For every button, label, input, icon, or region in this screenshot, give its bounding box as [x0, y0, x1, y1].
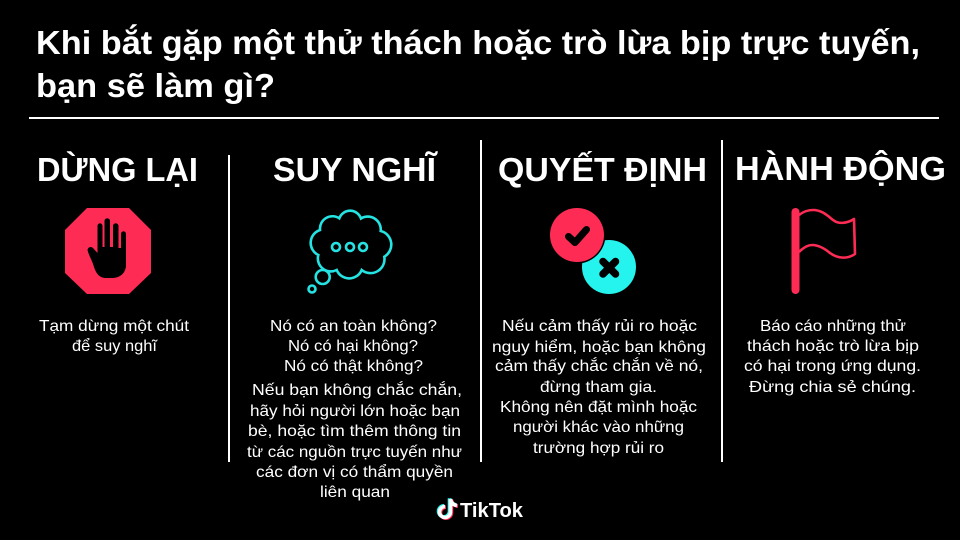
title	[36, 24, 920, 104]
text: think: từ các nguồn trực tuyến như	[247, 444, 462, 461]
text: think: liên quan	[320, 484, 390, 501]
heading: stop: DỪNG LẠI	[37, 151, 198, 188]
text: think: các đơn vị có thẩm quyền	[256, 463, 453, 481]
logo: TikTok: TikTok	[460, 500, 524, 522]
text: think: hãy hỏi người lớn hoặc bạn	[250, 403, 460, 420]
text: stop: Tạm dừng một chút	[39, 318, 190, 335]
text: stop: để suy nghĩ	[72, 337, 159, 355]
icon: thought bubble	[308, 211, 391, 292]
text: decide: đừng tham gia.	[540, 379, 657, 396]
text: decide: người khác vào những	[513, 419, 684, 436]
text: decide: nguy hiểm, hoặc bạn không	[492, 338, 706, 356]
text: decide: Nếu cảm thấy rủi ro hoặc	[502, 318, 697, 335]
text: act: Đừng chia sẻ chúng.	[749, 379, 916, 396]
heading: act: HÀNH ĐỘNG	[735, 149, 946, 187]
text: stop	[39, 318, 190, 355]
panel: decide	[492, 151, 707, 457]
text: act	[744, 318, 921, 396]
text: think	[247, 318, 462, 501]
panel: act	[735, 149, 946, 396]
title: Khi bắt gặp một thử thách hoặc trò lừa bịp trực tuyến,	[36, 24, 920, 61]
heading: think: SUY NGHĨ	[273, 151, 438, 188]
heading: decide: QUYẾT ĐỊNH	[498, 151, 707, 188]
text: act: Báo cáo những thử	[760, 318, 906, 335]
text: act: có hại trong ứng dụng.	[744, 358, 921, 375]
title: bạn sẽ làm gì?	[36, 67, 275, 104]
text: decide	[492, 318, 706, 457]
icon: stop hand	[65, 208, 151, 294]
panel: stop	[37, 151, 198, 355]
text: decide: Không nên đặt mình hoặc	[500, 399, 697, 416]
text: think: bè, hoặc tìm thêm thông tin	[248, 423, 461, 440]
logo: TikTok	[439, 498, 524, 522]
text: act: thách hoặc trò lừa bịp	[747, 338, 919, 355]
panel: think	[247, 151, 462, 501]
text: think: Nó có hại không?	[288, 338, 418, 355]
icon: check and cross	[548, 206, 636, 294]
text: think: Nếu bạn không chắc chắn,	[252, 380, 462, 399]
text: decide: trường hợp rủi ro	[533, 440, 664, 457]
text: think: Nó có thật không?	[284, 358, 423, 375]
text: think: Nó có an toàn không?	[270, 318, 437, 335]
text: decide: cảm thấy chắc chắn về nó,	[495, 356, 703, 375]
icon: flag	[796, 210, 855, 290]
